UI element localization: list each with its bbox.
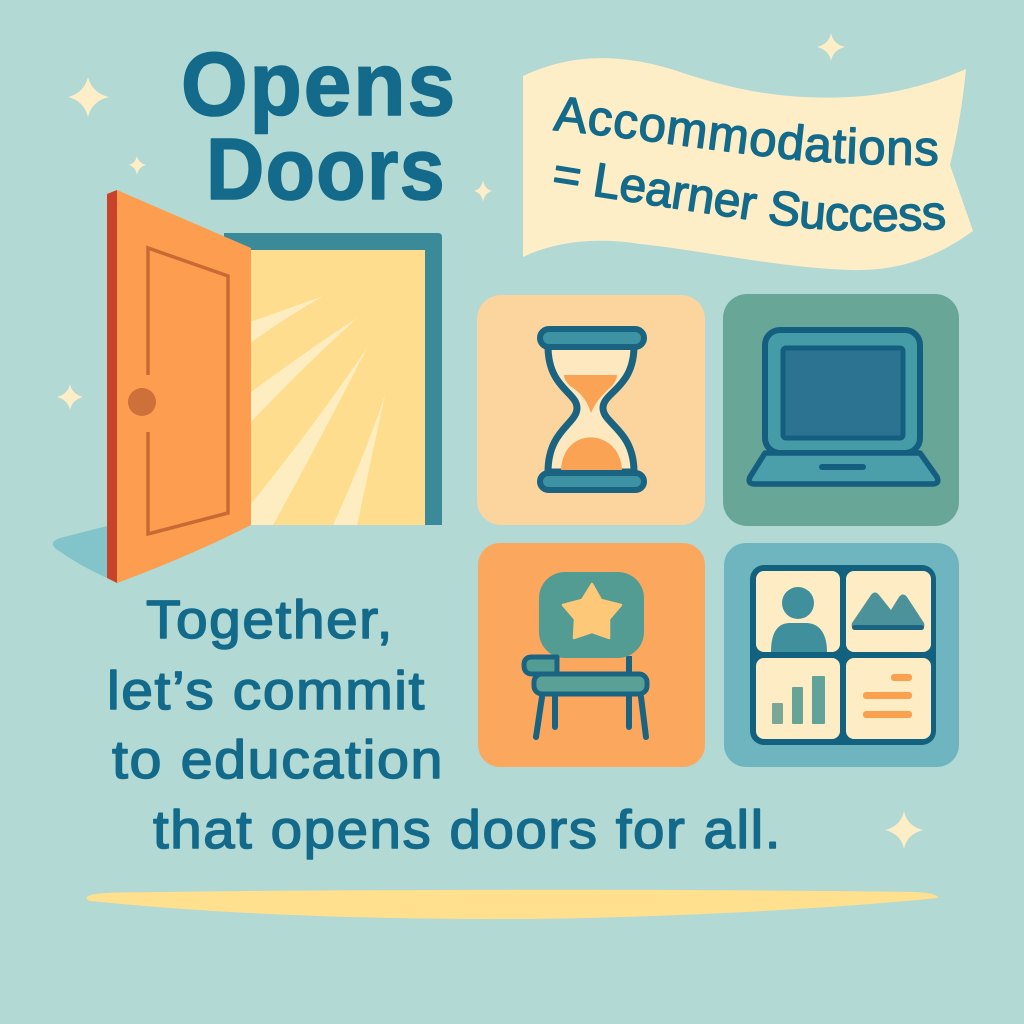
closing message: to education: [112, 730, 444, 790]
banner: [523, 58, 973, 270]
icon: laptop: [749, 330, 938, 484]
title: [181, 35, 457, 218]
underline bar: [86, 890, 938, 919]
sparkles: [57, 33, 923, 849]
icon: hourglass: [540, 329, 644, 490]
title: Opens: [181, 35, 457, 135]
closing message: [107, 590, 782, 860]
person: [771, 587, 827, 652]
lines: [863, 674, 912, 718]
light rays: [250, 296, 385, 525]
door shadow: [53, 526, 107, 578]
door leaf: [117, 190, 251, 583]
card: laptop: [723, 294, 959, 526]
icon: chair with star: [524, 572, 647, 737]
card: extra time: [477, 295, 705, 525]
title: Doors: [206, 121, 446, 218]
card: seating: [478, 543, 705, 767]
door frame: [224, 233, 442, 525]
closing message: let’s commit: [107, 661, 426, 721]
closing message: that opens doors for all.: [153, 800, 782, 860]
door opening light: [240, 250, 425, 525]
banner: Accommodations: [552, 97, 938, 166]
closing message: Together,: [146, 590, 394, 650]
bars: [772, 703, 783, 724]
door knob: [128, 388, 156, 416]
door: [53, 190, 442, 583]
banner: = Learner Success: [554, 162, 946, 232]
mountains: [852, 592, 924, 630]
card: visual supports: [724, 543, 959, 767]
icon: grid of visuals: [750, 565, 936, 745]
door panel: [148, 248, 228, 534]
door edge: [107, 190, 117, 583]
